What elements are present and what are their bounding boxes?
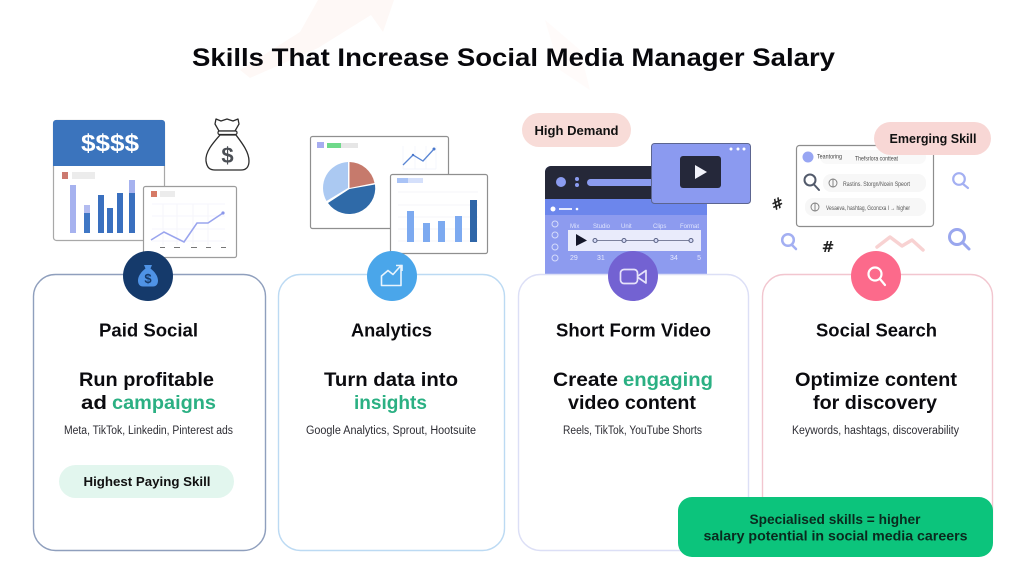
search results panel: Rastins. Storgn/Ncein Speort (843, 182, 910, 188)
headline (324, 369, 458, 414)
headline (79, 369, 216, 414)
video editor window: 31 (597, 255, 605, 262)
heading: Short Form Video (556, 320, 711, 340)
headline (795, 369, 958, 414)
headline: Run profitable (79, 369, 214, 391)
background arrow watermark (240, 0, 590, 90)
video editor window: Mix (570, 224, 579, 230)
callout: specialised skills (678, 497, 993, 557)
icons: search glass and hashtags: # (768, 193, 787, 215)
description: Keywords, hashtags, discoverability (792, 425, 959, 437)
panel: social search (762, 251, 992, 550)
icon: paid social badge: $ (144, 271, 152, 286)
illustration: analytics dashboards (310, 136, 488, 254)
video editor window: Clips (653, 224, 666, 230)
badge: emerging skill (874, 122, 991, 155)
icon: money report panel: $$$$ (81, 130, 140, 157)
badge: highest paying skill: Highest Paying Skill (84, 474, 210, 489)
video editor window: Unit (621, 224, 632, 230)
video editor window: 5 (697, 255, 701, 262)
video editor window: 34 (670, 255, 678, 262)
description: Google Analytics, Sprout, Hootsuite (306, 425, 476, 437)
panel: analytics (278, 251, 504, 550)
headline: insights (354, 392, 427, 414)
icons: search glass and hashtags: # (822, 238, 834, 256)
video editor window: Format (680, 224, 699, 230)
video editor window: Studio (593, 224, 611, 230)
heading: Paid Social (99, 320, 198, 340)
illustration: social search (768, 122, 991, 256)
description: Meta, TikTok, Linkedin, Pinterest ads (64, 425, 233, 437)
headline (553, 369, 713, 414)
video editor window: 29 (570, 255, 578, 262)
video player window (652, 144, 750, 204)
badge: emerging skill: Emerging Skill (890, 131, 976, 146)
icon: paid social badge (123, 251, 173, 301)
headline: ad (81, 392, 107, 414)
headline: for discovery (813, 392, 937, 414)
bar chart panel (390, 174, 488, 254)
headline: campaigns (112, 392, 216, 414)
badge: highest paying skill (59, 465, 234, 498)
description: Reels, TikTok, YouTube Shorts (563, 425, 702, 437)
headline: Create (553, 369, 618, 391)
icon: video badge (608, 251, 658, 301)
callout: specialised skills: Specialised skills = higher (750, 512, 921, 527)
heading: Social Search (816, 320, 937, 340)
title: Skills That Increase Social Media Manager Salary (192, 44, 835, 72)
headline: video content (568, 392, 697, 414)
headline: Turn data into (324, 369, 458, 391)
callout: specialised skills: salary potential in social media careers (704, 528, 968, 544)
heading: Analytics (351, 320, 432, 340)
pie chart panel (310, 136, 448, 228)
video editor window (545, 166, 707, 274)
illustration: paid social dashboards (53, 119, 249, 258)
panel: paid social (34, 251, 266, 550)
search results panel: Thefsrlora contteat (855, 156, 898, 162)
search results panel (796, 146, 934, 226)
search results panel: Vesaeva, hashtag, Gconcxa I → higher (826, 206, 910, 212)
search results panel: Teantoring (817, 154, 842, 160)
illustration: video editor (522, 113, 750, 274)
panel: short form video (518, 251, 748, 550)
icon: money bag: $ (221, 143, 234, 168)
badge: high demand: High Demand (534, 123, 619, 138)
line chart panel (144, 186, 236, 258)
icon: analytics badge (367, 251, 417, 301)
icons: search glass and hashtags (768, 173, 969, 256)
headline: engaging (623, 369, 713, 391)
icon: money report panel (53, 120, 165, 240)
headline: Optimize content (795, 369, 958, 391)
icon: money bag (206, 119, 249, 170)
badge: high demand (522, 113, 631, 147)
icon: search badge (851, 251, 901, 301)
